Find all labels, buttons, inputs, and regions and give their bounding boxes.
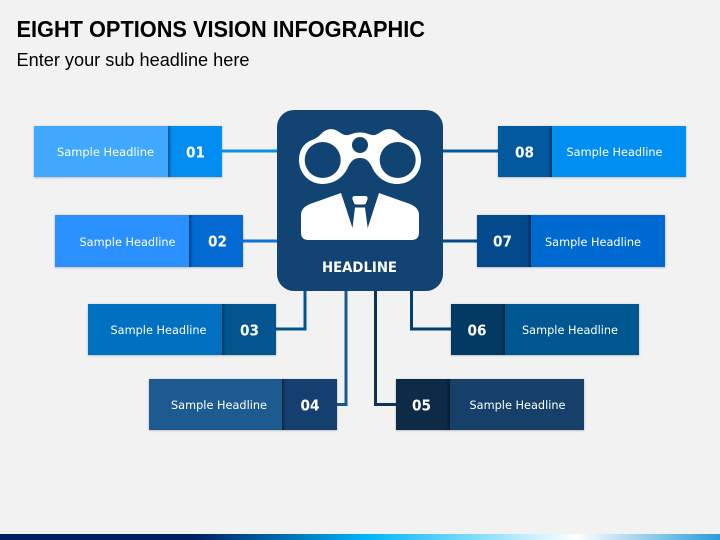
center headline: HEADLINE (322, 260, 397, 276)
title: EIGHT OPTIONS VISION INFOGRAPHIC (16, 16, 425, 42)
option 01: 01 (186, 144, 205, 162)
option 04: Sample Headline (171, 398, 267, 412)
option 08: 08 (515, 144, 534, 162)
option 02: Sample Headline (80, 235, 176, 249)
option 05 (396, 379, 584, 430)
connector: 08 (442, 150, 498, 152)
option 03 (88, 304, 276, 355)
connector: 07 (442, 240, 477, 242)
option 05: Sample Headline (470, 398, 566, 412)
option 05: 05 (412, 396, 431, 414)
option 07 (477, 215, 665, 267)
icon: suit and tie (301, 193, 419, 240)
connector: 03 (276, 290, 305, 329)
option 07: 07 (493, 232, 512, 250)
option 01 (34, 126, 222, 177)
option 02: 02 (208, 232, 227, 250)
option 08: Sample Headline (566, 145, 662, 159)
option 06: 06 (468, 322, 486, 340)
connector: 06 (412, 290, 451, 329)
option 08 (498, 126, 686, 177)
connector: 01 (222, 150, 278, 152)
connector: 05 (376, 290, 396, 404)
option 06: Sample Headline (522, 323, 618, 337)
connector: 04 (337, 290, 346, 404)
option 01: Sample Headline (57, 145, 154, 159)
connector: 02 (243, 240, 278, 242)
option 06 (451, 304, 639, 355)
bottom gradient bar (0, 534, 720, 540)
option 03: Sample Headline (110, 323, 206, 337)
center panel (277, 110, 443, 291)
subtitle: Enter your sub headline here (16, 50, 250, 70)
option 02 (55, 215, 243, 267)
icon: binoculars (299, 129, 421, 184)
option 07: Sample Headline (545, 235, 641, 249)
icon: tie knot (352, 196, 368, 204)
option 03: 03 (240, 322, 259, 340)
option 04: 04 (300, 396, 320, 414)
option 04 (149, 379, 337, 430)
